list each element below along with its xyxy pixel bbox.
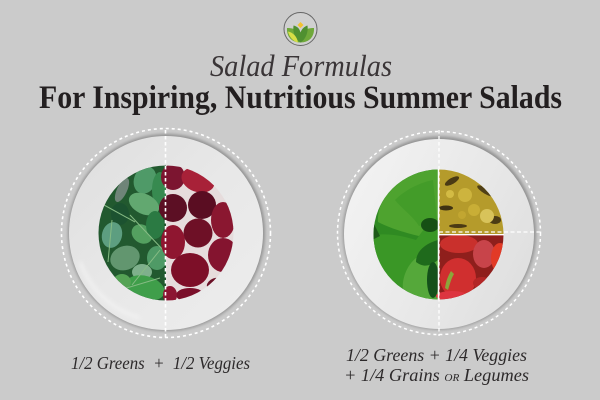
plate: half greens half veggies [62,128,270,338]
food: greens half [98,163,168,305]
plate rim [68,134,265,331]
food: peppers quarter [436,235,504,300]
food: lettuce half [372,169,439,300]
heading: Salad Formulas: Salad Formulas [210,48,392,83]
caption: left formula: 1/2 Greens + 1/2 Veggies [71,353,250,373]
caption: right formula: + 1/4 Grains OR Legumes [344,365,529,385]
caption: right formula [344,345,529,385]
title: For Inspiring, Nutritious Summer Salads [39,80,562,116]
food: beets half [159,163,238,304]
quadrant dividers [438,130,540,336]
plate rim [343,136,536,330]
dashed guide ring [62,128,270,338]
dashed divider [164,130,166,338]
caption: right formula: 1/2 Greens + 1/4 Veggies [346,345,527,365]
logo icon [284,12,317,46]
dashed guide ring [338,132,540,334]
food: grains quarter [438,169,504,234]
plate: half greens, quarter veggies, quarter grains [338,130,540,336]
